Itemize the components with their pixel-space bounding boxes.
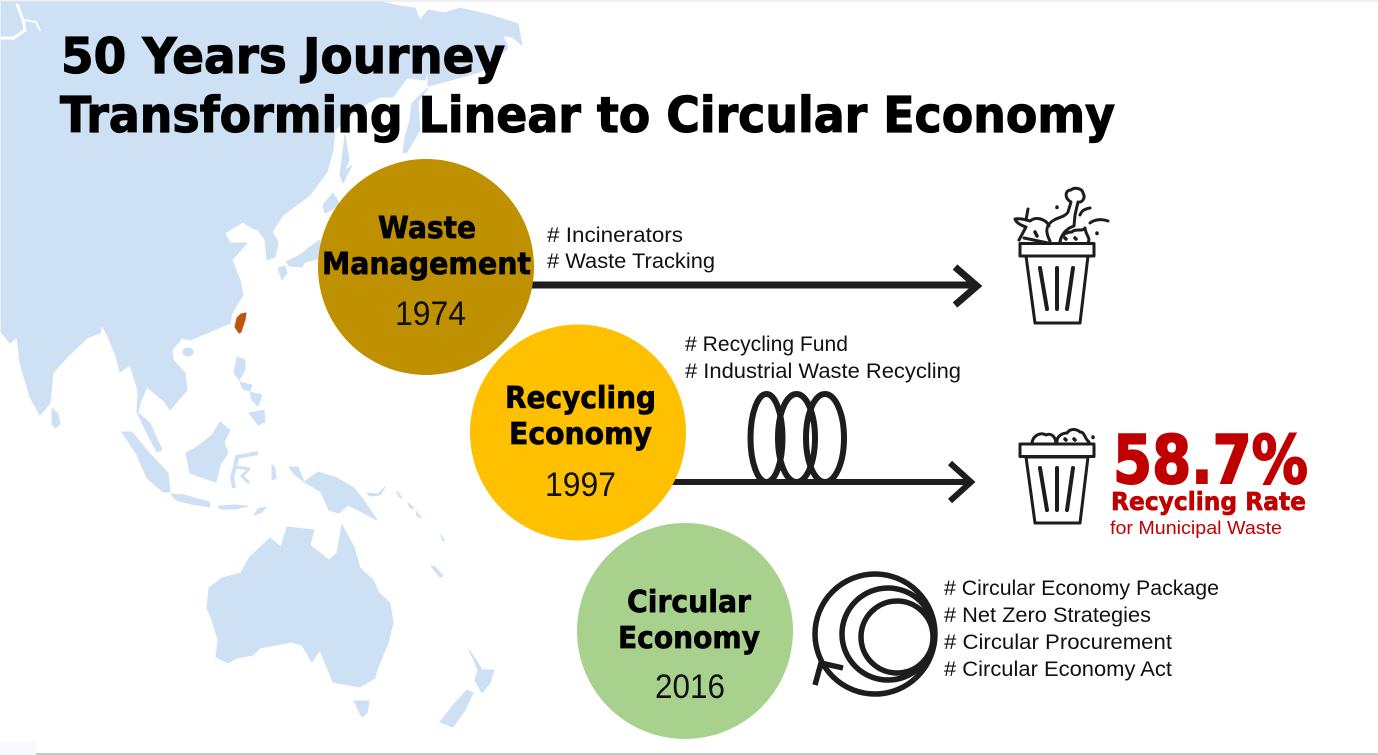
circle: Circular Economy 2016: Circular xyxy=(627,585,751,620)
tags: circular economy: # Circular Economy Act xyxy=(944,658,1172,681)
tags: recycling economy xyxy=(685,333,961,383)
circle: Waste Management 1974 xyxy=(318,159,534,375)
tags: circular economy: # Circular Economy Package xyxy=(944,577,1219,600)
callout: 58.7% recycling rate xyxy=(1110,421,1308,538)
background map: Asia-Pacific xyxy=(0,2,522,727)
callout: 58.7% recycling rate: Recycling Rate xyxy=(1111,487,1306,516)
tags: waste management: # Incinerators xyxy=(547,224,683,247)
circle: Recycling Economy 1997: 1997 xyxy=(545,466,616,504)
circle: Circular Economy 2016: Economy xyxy=(618,621,760,656)
arrow: recycling loops xyxy=(670,394,971,501)
title xyxy=(60,28,1115,144)
circle: Recycling Economy 1997: Recycling xyxy=(505,381,656,416)
callout: 58.7% recycling rate: 58.7% xyxy=(1113,421,1308,499)
circle: Circular Economy 2016: 2016 xyxy=(655,668,725,706)
circle: Waste Management 1974: Management xyxy=(322,247,531,282)
title: 50 Years Journey xyxy=(61,28,505,85)
callout: 58.7% recycling rate: for Municipal Waste xyxy=(1110,518,1282,538)
tags: waste management xyxy=(547,224,715,273)
icon: circular spiral arrow xyxy=(815,574,935,694)
tags: recycling economy: # Industrial Waste Recycling xyxy=(685,360,961,383)
icon: reduced trash can xyxy=(1020,429,1094,523)
circle: Recycling Economy 1997: Economy xyxy=(509,417,652,452)
circle: Waste Management 1974: Waste xyxy=(378,211,476,246)
tags: circular economy xyxy=(944,577,1219,681)
tags: circular economy: # Net Zero Strategies xyxy=(944,604,1151,627)
tags: circular economy: # Circular Procurement xyxy=(944,631,1172,654)
tags: waste management: # Waste Tracking xyxy=(547,250,715,273)
arrow: linear path xyxy=(530,267,977,305)
title: Transforming Linear to Circular Economy xyxy=(60,87,1115,144)
circle: Circular Economy 2016 xyxy=(577,523,793,739)
circle: Recycling Economy 1997 xyxy=(470,324,686,540)
circle: Waste Management 1974: 1974 xyxy=(395,295,466,333)
tags: recycling economy: # Recycling Fund xyxy=(685,333,848,356)
icon: overflowing trash can xyxy=(1015,188,1108,323)
Taiwan highlight xyxy=(235,313,246,333)
